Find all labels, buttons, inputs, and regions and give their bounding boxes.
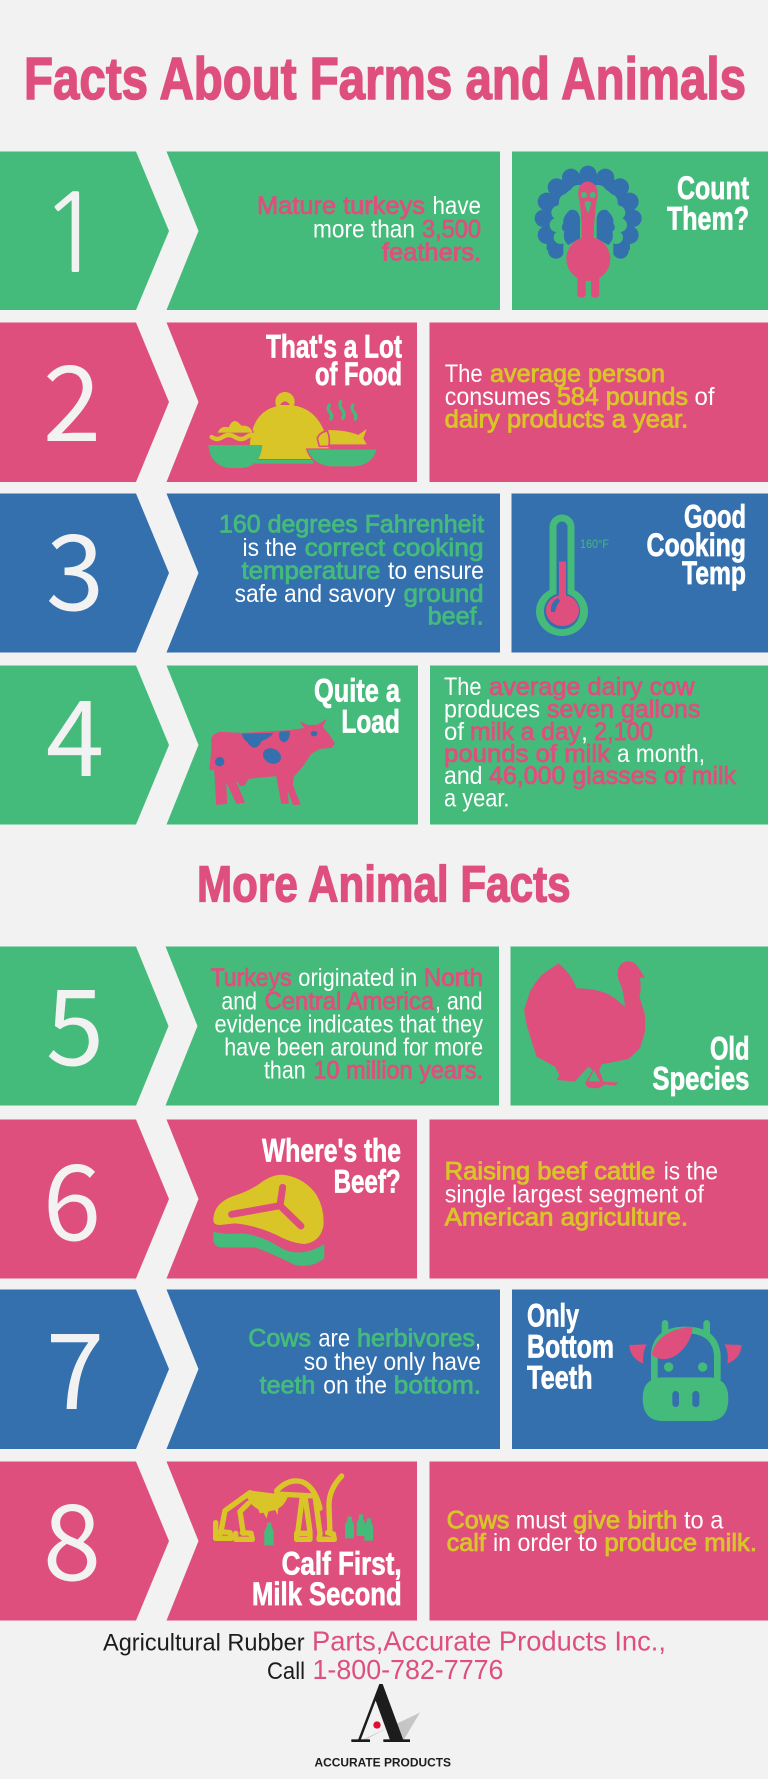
icon: thermometer: [536, 514, 609, 636]
number chevron 6: 6: [43, 1119, 101, 1271]
fact panel 4: average dairy cow: [489, 673, 695, 701]
icon panel 3: thermometer: Good: [684, 499, 746, 535]
fact panel 5: and: [221, 987, 257, 1015]
icon: covered meal: [208, 392, 377, 468]
fact panel 1: [166, 152, 500, 310]
fact panel 3: [166, 494, 500, 652]
fact panel 8: must: [516, 1506, 567, 1534]
number chevron 7: 7: [46, 1288, 104, 1440]
logo: Accurate Products: ACCURATE PRODUCTS: [314, 1756, 451, 1770]
fact panel 2: average person: [490, 360, 665, 388]
fact panel 7: herbivores: [357, 1325, 475, 1353]
row 5: old species: [0, 944, 768, 1106]
fact panel 5: Central America: [264, 987, 434, 1015]
fact panel 5: Turkeys: [211, 964, 292, 992]
fact panel 4: [430, 666, 768, 824]
icon panel 7: cow head: Bottom: [527, 1329, 614, 1365]
fact panel 8: Cows: [447, 1506, 509, 1534]
icon: thermometer: 160°F: [580, 539, 609, 551]
fact panel 2: dairy products a year.: [445, 406, 688, 434]
fact panel 6: [430, 1120, 768, 1278]
fact panel 7: so they only have: [304, 1348, 481, 1376]
section heading: More Animal Facts: [197, 856, 571, 913]
row 7: teeth: [0, 1288, 768, 1449]
logo: Accurate Products: [314, 1684, 451, 1770]
number chevron 1: [0, 152, 169, 310]
fact panel 7: Cows: [248, 1325, 311, 1353]
number chevron 6: [0, 1119, 169, 1278]
fact panel 3: temperature: [242, 557, 380, 585]
fact panel 2: of: [694, 383, 715, 411]
number chevron 5: 5: [46, 944, 104, 1096]
fact panel 1: have: [432, 192, 481, 220]
icon panel 4: cow: Load: [341, 704, 400, 740]
icon panel 1: turkey: [512, 152, 768, 310]
fact panel 3: to ensure: [388, 557, 484, 585]
fact panel 4: ,: [581, 718, 588, 746]
fact panel 4: a year.: [444, 785, 510, 813]
fact panel 4: pounds of milk: [444, 740, 611, 768]
number chevron 4: 4: [46, 655, 104, 807]
icon panel 8: milking: [166, 1462, 417, 1620]
fact panel 3: ground: [404, 580, 484, 608]
fact panel 3: correct cooking: [305, 534, 484, 562]
fact panel 3: 160 degrees Fahrenheit: [219, 510, 484, 538]
fact panel 8: to a: [684, 1506, 723, 1534]
fact panel 8: in order to: [493, 1529, 598, 1557]
row 4: dairy cow: [0, 655, 768, 824]
icon panel 5: turkey silhouette: Old: [710, 1030, 750, 1066]
fact panel 4: produces: [444, 695, 540, 723]
footer contact text: Parts,Accurate Products Inc.,: [312, 1626, 666, 1657]
fact panel 1: more than: [313, 215, 415, 243]
fact panel 4: 46,000 glasses of milk: [489, 762, 736, 790]
row 8: calf first: [0, 1459, 768, 1620]
number chevron 5: [0, 944, 168, 1106]
fact panel 7: [166, 1290, 500, 1449]
number chevron 3: [0, 489, 169, 652]
number chevron 1: 1: [39, 180, 105, 288]
fact panel 8: give birth: [573, 1506, 677, 1534]
row 6: beef: [0, 1119, 768, 1278]
icon: turkey silhouette: [524, 961, 645, 1088]
icon panel 1: turkey: Count: [677, 170, 749, 206]
fact panel 7: on the: [323, 1371, 387, 1399]
icon panel 5: turkey silhouette: [510, 946, 768, 1106]
number chevron 2: [0, 320, 169, 482]
icon panel 7: cow head: [512, 1290, 768, 1449]
fact panel 5: 10 million years.: [314, 1056, 483, 1084]
fact panel 4: The: [444, 673, 482, 701]
fact panel 3: safe and savory: [235, 580, 396, 608]
icon panel 6: steak: [166, 1120, 417, 1278]
icon panel 8: milking: Milk Second: [252, 1576, 402, 1612]
fact panel 1: 3,500: [422, 215, 481, 243]
icon panel 3: thermometer: [512, 494, 768, 652]
fact panel 4: and: [444, 762, 482, 790]
fact panel 6: is the: [664, 1157, 718, 1185]
footer contact text: Agricultural Rubber: [103, 1630, 305, 1657]
footer contact text: 1-800-782-7776: [312, 1654, 504, 1685]
fact panel 2: consumes: [445, 383, 551, 411]
number chevron 8: 8: [43, 1459, 101, 1611]
fact panel 7: teeth: [260, 1371, 315, 1399]
fact panel 4: seven gallons: [547, 695, 700, 723]
fact panel 8: produce milk.: [604, 1529, 757, 1557]
icon panel 6: steak: Where's the: [262, 1133, 401, 1169]
fact panel 4: 2,100: [594, 718, 653, 746]
fact panel 5: than: [264, 1056, 306, 1084]
fact panel 5: , and: [435, 987, 482, 1015]
number chevron 2: 2: [43, 320, 101, 472]
number chevron 7: [0, 1288, 169, 1449]
row 2: food: [0, 320, 768, 482]
fact panel 3: beef.: [428, 602, 484, 630]
fact panel 7: are: [318, 1325, 350, 1353]
fact panel 4: of: [444, 718, 464, 746]
icon panel 8: milking: Calf First,: [282, 1545, 402, 1581]
fact panel 2: 584 pounds: [557, 383, 688, 411]
fact panel 4: a month,: [617, 740, 705, 768]
fact panel 4: milk a day: [470, 718, 581, 746]
icon panel 4: cow: [166, 666, 418, 824]
fact panel 8: [430, 1462, 768, 1620]
footer contact text: [103, 1626, 666, 1685]
row 1: turkey feathers: [0, 152, 768, 310]
fact panel 8: calf: [447, 1529, 486, 1557]
fact panel 5: have been around for more: [224, 1033, 483, 1061]
row 3: cooking temperature: [0, 489, 768, 652]
fact panel 3: is the: [242, 534, 297, 562]
icon panel 2: food: of Food: [315, 356, 402, 392]
fact panel 5: evidence indicates that they: [214, 1011, 483, 1039]
icon panel 2: food: That's a Lot: [266, 328, 402, 364]
fact panel 1: Mature turkeys: [257, 192, 425, 220]
icon: cow head: [629, 1320, 742, 1421]
fact panel 2: [430, 322, 768, 482]
fact panel 2: The: [445, 360, 483, 388]
fact panel 6: single largest segment of: [445, 1181, 704, 1209]
fact panel 7: bottom.: [394, 1371, 481, 1399]
icon panel 6: steak: Beef?: [334, 1163, 401, 1199]
icon: cow: [210, 720, 334, 804]
icon panel 4: cow: Quite a: [314, 673, 400, 709]
fact panel 7: ,: [475, 1325, 481, 1353]
fact panel 5: [166, 946, 499, 1106]
icon panel 7: cow head: Teeth: [527, 1360, 593, 1396]
icon panel 7: cow head: Only: [527, 1298, 579, 1334]
fact panel 1: feathers.: [382, 239, 481, 267]
icon panel 3: thermometer: Temp: [682, 555, 746, 591]
icon: turkey: [535, 166, 642, 298]
footer contact text: Call: [267, 1658, 305, 1685]
fact panel 5: North: [424, 964, 483, 992]
number chevron 3: 3: [46, 489, 104, 641]
fact panel 5: originated in: [298, 964, 417, 992]
number chevron 8: [0, 1459, 169, 1620]
fact panel 6: Raising beef cattle: [445, 1157, 655, 1185]
fact panel 6: American agriculture.: [445, 1203, 688, 1231]
icon: steak: [213, 1175, 324, 1266]
icon: milking cow and bottles: [216, 1476, 373, 1545]
icon panel 2: food: [166, 322, 417, 482]
number chevron 4: [0, 655, 169, 824]
